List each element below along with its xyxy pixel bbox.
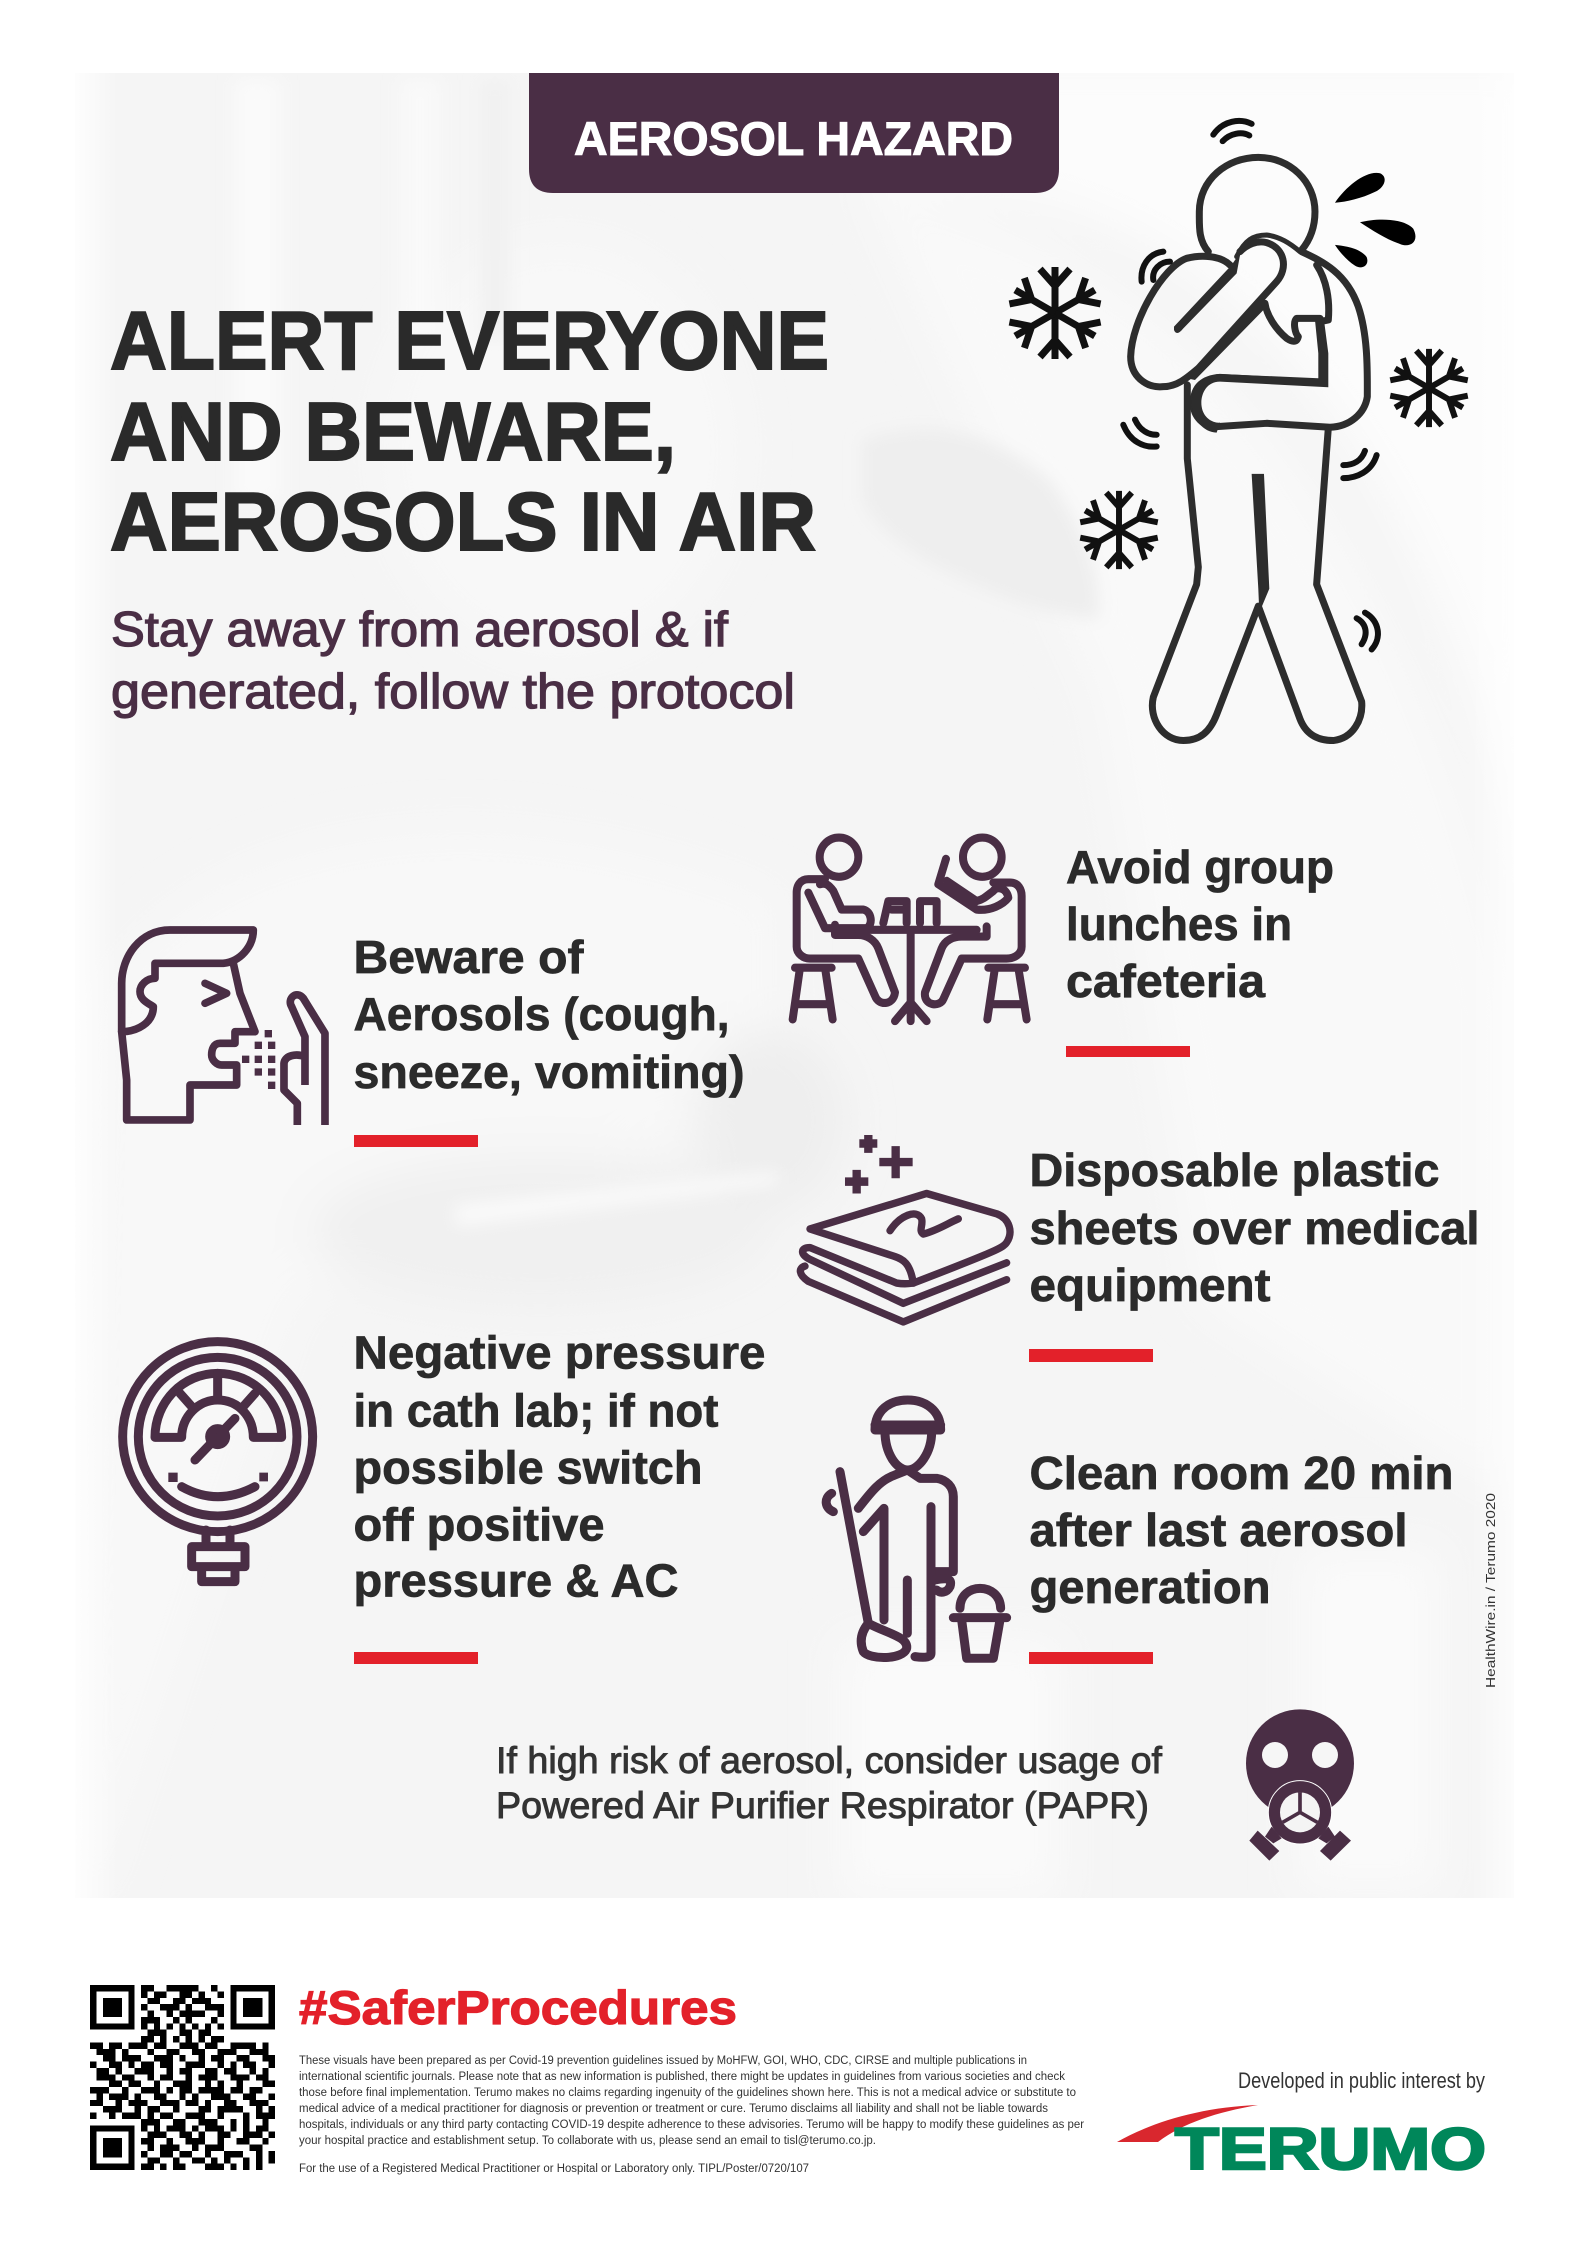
credit: vertical: HealthWire.in / Terumo 2020 (1483, 1493, 1498, 1688)
disclaimer text (299, 2055, 1084, 2175)
icon: snowflake right (1389, 349, 1469, 427)
icon: person sneezing into hand (122, 930, 325, 1125)
disclaimer text: hospitals, individuals or any third party contacting COVID-19 despite adherence to these advisories. Terumo will be happy to modify these guidelines as per (299, 2119, 1084, 2131)
disclaimer text: international scientific journals. Please note that as new information is published, there might be updates in guidelines from various societies and check (299, 2071, 1065, 2083)
disclaimer text: These visuals have been prepared as per Covid-19 prevention guidelines issued by MoHFW, GOI, WHO, CDC, CIRSE and multiple publications in (299, 2055, 1027, 2067)
red bar (1029, 1349, 1153, 1362)
subtitle: generated, follow the protocol (111, 665, 795, 719)
title: AEROSOLS IN AIR (110, 475, 816, 568)
text: avoid group lunches: cafeteria (1066, 955, 1265, 1007)
text: disposable plastic sheets: equipment (1030, 1259, 1270, 1311)
header tab: aerosol hazard: AEROSOL HAZARD (574, 112, 1013, 165)
title: ALERT EVERYONE (110, 294, 829, 387)
text: clean room: Clean room 20 min (1030, 1447, 1454, 1499)
hashtag: #SaferProcedures (299, 1981, 737, 2034)
disclaimer text: medical advice of a medical practitioner for diagnosis or prevention or treatment or cure. Terumo disclaims all liability and shall not be liable towards (299, 2103, 1048, 2115)
icon: cleaner with mop and bucket (826, 1400, 1007, 1658)
text: beware of aerosols: Beware of (354, 931, 584, 983)
text: clean room: after last aerosol (1030, 1504, 1408, 1556)
text: negative pressure: off positive (354, 1498, 604, 1550)
red bar (354, 1652, 478, 1664)
red bar (1066, 1046, 1190, 1057)
text: negative pressure: pressure & AC (354, 1554, 678, 1606)
icon: shivering person coughing (1123, 121, 1415, 741)
text: negative pressure (354, 1326, 766, 1606)
logo: Terumo (1117, 2105, 1486, 2182)
text: disposable plastic sheets (1030, 1144, 1480, 1311)
text: beware of aerosols: sneeze, vomiting) (354, 1046, 744, 1098)
text: avoid group lunches (1066, 841, 1334, 1007)
text: PAPR advice: If high risk of aerosol, consider usage of (496, 1740, 1163, 1781)
icon: snowflake large (1008, 267, 1102, 359)
text: beware of aerosols (354, 931, 744, 1098)
text: PAPR advice: Powered Air Purifier Respirator (PAPR) (496, 1785, 1149, 1826)
text: negative pressure: in cath lab; if not (354, 1384, 718, 1436)
text: negative pressure: Negative pressure (354, 1326, 766, 1378)
disclaimer text: For the use of a Registered Medical Practitioner or Hospital or Laboratory only. TIPL/Poster/0720/107 (299, 2163, 809, 2175)
red bar (354, 1135, 478, 1147)
disclaimer text: your hospital practice and establishment setup. To collaborate with us, please send an email to tisl@terumo.co.jp. (299, 2135, 876, 2147)
text: negative pressure: possible switch (354, 1442, 702, 1494)
text: clean room (1030, 1447, 1454, 1613)
title: AND BEWARE, (110, 385, 676, 478)
header tab: aerosol hazard (529, 73, 1059, 193)
text: beware of aerosols: Aerosols (cough, (354, 988, 730, 1040)
disclaimer text: those before final implementation. Terumo makes no claims regarding ingenuity of the guidelines shown here. This is not a medical advice or substitute to (299, 2087, 1076, 2099)
icon: folded plastic sheets (800, 1135, 1010, 1322)
subtitle (111, 603, 795, 719)
icon: two people at cafeteria table (793, 838, 1027, 1021)
panel: faded background photo (75, 60, 1540, 1900)
text: avoid group lunches: Avoid group (1066, 841, 1334, 893)
credit: developed by: Developed in public interest by (1238, 2068, 1485, 2093)
text: disposable plastic sheets: Disposable plastic (1030, 1144, 1440, 1196)
upper body (1131, 157, 1367, 433)
icon: gas mask respirator (1246, 1709, 1354, 1861)
red bar (1029, 1652, 1153, 1664)
subtitle: Stay away from aerosol & if (111, 603, 728, 657)
text: PAPR advice (496, 1740, 1163, 1826)
title (110, 294, 829, 568)
logo: Terumo: TERUMO (1175, 2117, 1486, 2182)
droplets (1335, 173, 1415, 267)
text: clean room: generation (1030, 1561, 1270, 1613)
icon: snowflake lower (1079, 491, 1159, 569)
text: avoid group lunches: lunches in (1066, 898, 1292, 950)
legs and lower details (1123, 121, 1415, 741)
icon: pressure gauge (123, 1342, 313, 1582)
text: disposable plastic sheets: sheets over medical (1030, 1202, 1480, 1254)
QR code (90, 1988, 275, 2167)
